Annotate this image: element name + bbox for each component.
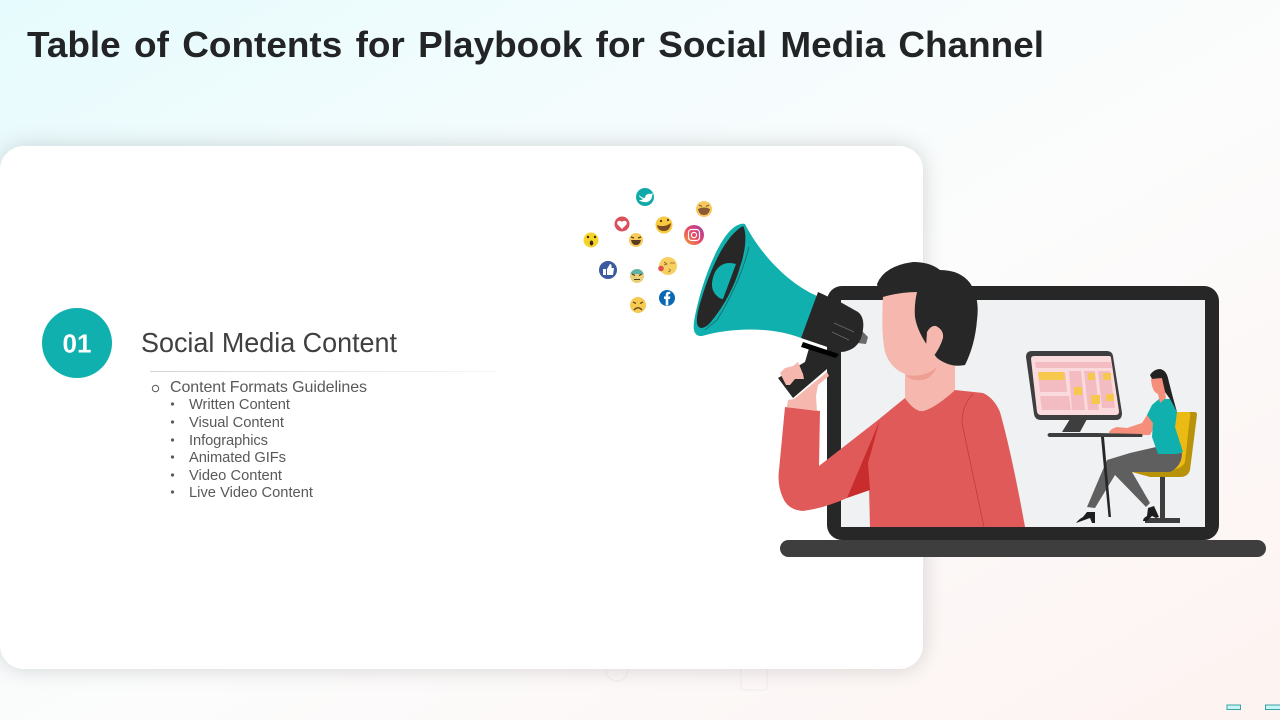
icon: angry emoji bbox=[630, 269, 644, 283]
icon: twitter bbox=[636, 188, 654, 206]
man: hair bbox=[877, 262, 978, 366]
chair bbox=[1132, 412, 1197, 523]
panel: content card bbox=[0, 146, 923, 669]
sub-heading: Content Formats Guidelines bbox=[170, 379, 367, 396]
section heading: Social Media Content bbox=[141, 327, 397, 358]
laptop frame bbox=[827, 286, 1219, 540]
section number badge bbox=[42, 308, 112, 378]
man: shirt bbox=[778, 390, 1025, 527]
hand fingers bbox=[780, 362, 804, 385]
footer marker left bbox=[1227, 705, 1240, 710]
icon: grinning emoji bbox=[656, 216, 672, 234]
icon: like bbox=[599, 261, 617, 279]
footer marker right bbox=[1266, 705, 1280, 710]
hand palm bbox=[787, 372, 829, 411]
icon: kissing emoji bbox=[658, 257, 677, 275]
section number badge: 01 bbox=[63, 328, 91, 358]
desk bbox=[1048, 433, 1142, 517]
list item: Live Video Content: Live Video Content bbox=[189, 485, 313, 501]
icon: heart bbox=[614, 216, 630, 232]
illustration: woman at desk bbox=[1026, 351, 1197, 523]
megaphone grip bbox=[778, 345, 838, 398]
megaphone body bbox=[801, 292, 868, 358]
illustration: laptop bbox=[780, 286, 1266, 557]
list item: Video Content: Video Content bbox=[189, 468, 282, 484]
list item: Infographics: Infographics bbox=[189, 433, 268, 449]
list item: Animated GIFs: Animated GIFs bbox=[189, 450, 286, 466]
icon: sad emoji bbox=[630, 297, 646, 313]
faint background social icons bbox=[606, 659, 767, 690]
woman bbox=[1076, 369, 1183, 523]
megaphone bell bbox=[694, 224, 817, 338]
laptop base bbox=[780, 540, 1266, 557]
list item: Visual Content: Visual Content bbox=[189, 415, 284, 431]
icon: facebook bbox=[659, 290, 675, 306]
icon: social media emoji cluster bbox=[584, 188, 712, 313]
list item: Written Content: Written Content bbox=[189, 397, 290, 413]
monitor bbox=[1026, 351, 1122, 432]
man: neck and face bbox=[882, 290, 955, 411]
icon: squinting emoji bbox=[629, 233, 643, 247]
divider under heading bbox=[150, 371, 496, 372]
title: Table of Contents for Playbook for Social Media Channel bbox=[27, 24, 1044, 65]
illustration: megaphone bbox=[694, 224, 868, 411]
contents list bbox=[152, 379, 367, 501]
icon: instagram bbox=[684, 225, 704, 245]
icon: surprised emoji bbox=[584, 232, 598, 248]
laptop screen bbox=[841, 300, 1205, 527]
icon: laughing emoji bbox=[696, 201, 712, 217]
man: ear bbox=[926, 326, 943, 357]
illustration: man with megaphone bbox=[778, 262, 1025, 527]
